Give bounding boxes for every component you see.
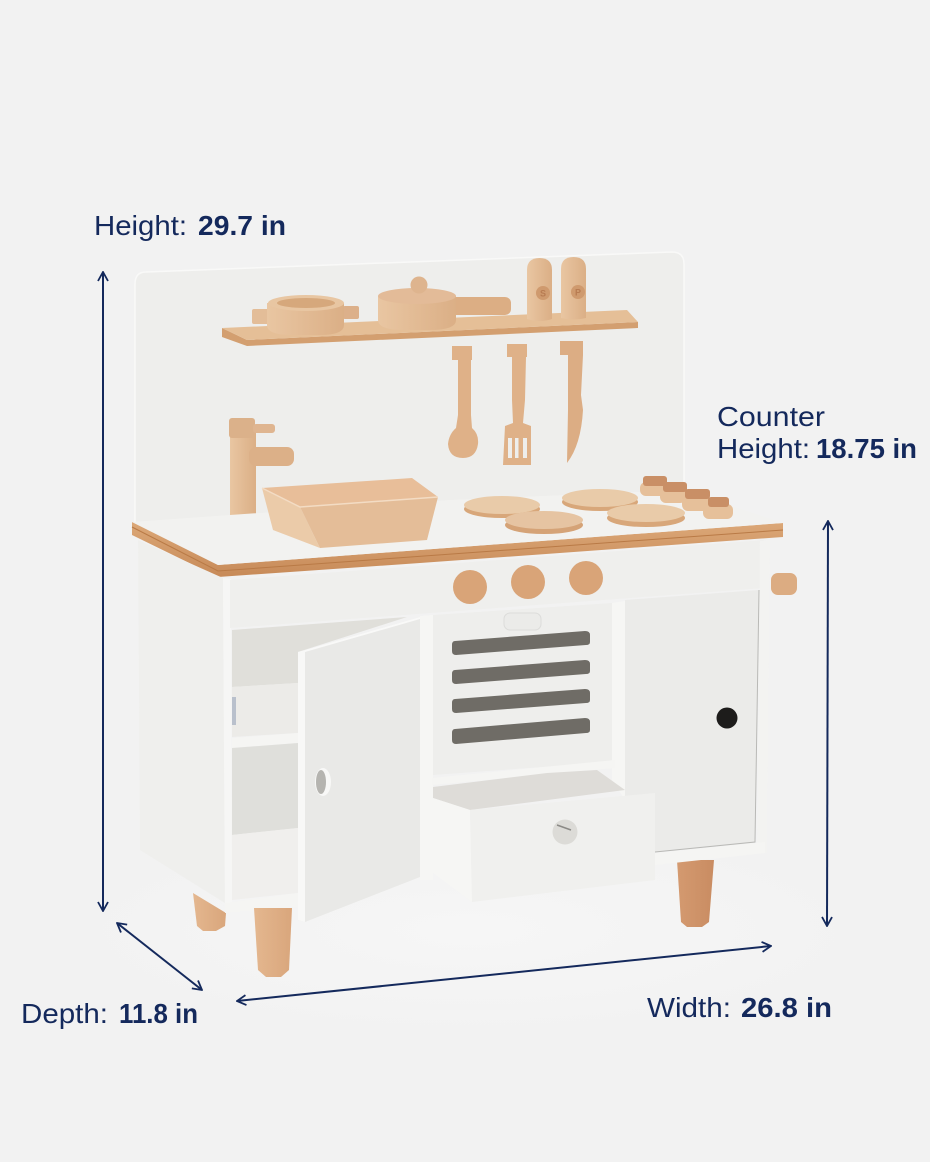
top front rail: [230, 540, 764, 628]
dimension: counter height: 18.75 in: [816, 433, 917, 464]
lower right rail: [655, 842, 765, 865]
dimension: counter height: Height:: [717, 433, 810, 464]
dimension: depth: 11.8 in: [119, 998, 198, 1029]
dimension: width: 26.8 in: [741, 992, 832, 1023]
sink: [262, 478, 438, 548]
dimension: height: [94, 210, 286, 911]
counter top: [132, 490, 783, 577]
shelf with pots: S: [540, 288, 546, 298]
dimension: depth: [21, 923, 202, 1029]
kitchen illustration: [132, 252, 797, 977]
floor highlight: [50, 820, 890, 1040]
back legs: [193, 860, 714, 931]
dimension: height: Height:: [94, 210, 187, 241]
salt and pepper shakers: [527, 258, 552, 321]
right post and side handle: [757, 540, 770, 853]
dimension: width: Width:: [647, 992, 731, 1023]
bottom rail: [225, 893, 298, 913]
left cabinet interior: [232, 617, 407, 900]
hanging utensils: [448, 341, 583, 465]
burners and oven knobs: [464, 476, 733, 534]
dimension: depth: Depth:: [21, 998, 108, 1029]
front leg: [254, 908, 292, 977]
shelf with pots: [222, 257, 638, 346]
left side panel: [138, 540, 225, 903]
knobs: [453, 561, 603, 604]
dimension: width: [237, 946, 832, 1023]
backboard: [135, 252, 684, 525]
dimension: counter height: Counter: [717, 401, 825, 432]
saucepan: [450, 297, 511, 315]
shelf with pots: P: [575, 288, 581, 298]
front left stile: [223, 578, 232, 912]
open drawer: [433, 770, 655, 902]
pot: [252, 309, 277, 324]
dimension: height: 29.7 in: [198, 210, 286, 241]
faucet: [229, 418, 294, 528]
right cabinet door: [625, 590, 759, 852]
open cabinet door: [298, 617, 420, 922]
dimension: counter height: [717, 401, 917, 926]
oven vent panel: [432, 603, 615, 785]
center and right posts: [420, 615, 433, 880]
